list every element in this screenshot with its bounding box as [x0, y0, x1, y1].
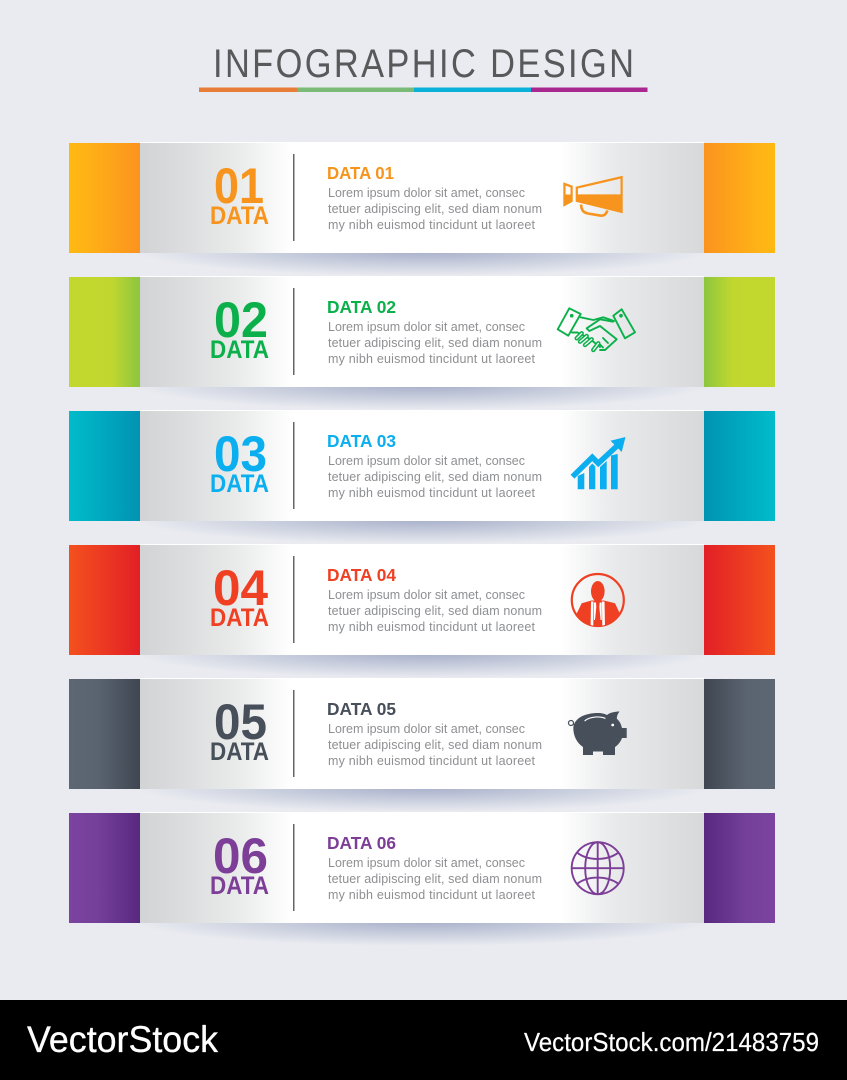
number 02: DATA	[210, 336, 269, 364]
icon: businessman	[572, 574, 624, 628]
watermark logo: VectorStock	[27, 1019, 218, 1060]
body text 01: Lorem ipsum dolor sit amet, consec	[328, 186, 525, 200]
body text 03	[328, 454, 542, 500]
panel: data 02	[69, 276, 775, 410]
body text 05: Lorem ipsum dolor sit amet, consec	[328, 722, 525, 736]
number 04: 04	[213, 560, 268, 616]
body text 06: tetuer adipiscing elit, sed diam nonum	[328, 872, 542, 886]
body text 04	[328, 588, 542, 634]
number 05: 05	[214, 694, 267, 750]
number 03: 03	[214, 426, 267, 482]
body text 04: Lorem ipsum dolor sit amet, consec	[328, 588, 525, 602]
footer bar	[0, 1000, 847, 1080]
number 02: 02	[214, 292, 268, 348]
heading 01: DATA 01	[327, 163, 394, 183]
panel: data 03	[69, 410, 775, 544]
body text 02: tetuer adipiscing elit, sed diam nonum	[328, 336, 542, 350]
icon: piggy bank	[568, 712, 627, 755]
body text 05: tetuer adipiscing elit, sed diam nonum	[328, 738, 542, 752]
body text 03: Lorem ipsum dolor sit amet, consec	[328, 454, 525, 468]
body text 04: tetuer adipiscing elit, sed diam nonum	[328, 604, 542, 618]
number 04: DATA	[210, 604, 269, 632]
body text 06: Lorem ipsum dolor sit amet, consec	[328, 856, 525, 870]
body text 06: my nibh euismod tincidunt ut laoreet	[328, 888, 536, 902]
body text 06	[328, 856, 542, 902]
body text 01: my nibh euismod tincidunt ut laoreet	[328, 218, 536, 232]
number 06: 06	[213, 828, 268, 884]
body text 02: my nibh euismod tincidunt ut laoreet	[328, 352, 536, 366]
body text 02	[328, 320, 542, 366]
number 05: DATA	[210, 738, 269, 766]
icon: growth chart	[572, 437, 626, 489]
number 01: 01	[214, 158, 264, 214]
icon: handshake	[558, 308, 635, 350]
panel: data 01	[69, 142, 775, 276]
icon: megaphone	[563, 176, 623, 216]
watermark url: VectorStock.com/21483759	[524, 1027, 819, 1057]
panel: data 04	[69, 544, 775, 678]
heading 03: DATA 03	[327, 431, 396, 451]
heading 04: DATA 04	[327, 565, 396, 585]
body text 04: my nibh euismod tincidunt ut laoreet	[328, 620, 536, 634]
body text 03: my nibh euismod tincidunt ut laoreet	[328, 486, 536, 500]
number 06: DATA	[210, 872, 269, 900]
panel: data 06	[69, 812, 775, 946]
panel: data 05	[69, 678, 775, 812]
body text 01	[328, 186, 542, 232]
number 03: DATA	[210, 470, 269, 498]
heading 02: DATA 02	[327, 297, 396, 317]
body text 03: tetuer adipiscing elit, sed diam nonum	[328, 470, 542, 484]
body text 05	[328, 722, 542, 768]
body text 02: Lorem ipsum dolor sit amet, consec	[328, 320, 525, 334]
title underline	[199, 88, 648, 92]
body text 01: tetuer adipiscing elit, sed diam nonum	[328, 202, 542, 216]
number 01: DATA	[210, 202, 269, 230]
title: INFOGRAPHIC DESIGN	[213, 41, 634, 86]
icon: globe	[572, 842, 624, 894]
heading 05: DATA 05	[327, 699, 396, 719]
body text 05: my nibh euismod tincidunt ut laoreet	[328, 754, 536, 768]
heading 06: DATA 06	[327, 833, 396, 853]
